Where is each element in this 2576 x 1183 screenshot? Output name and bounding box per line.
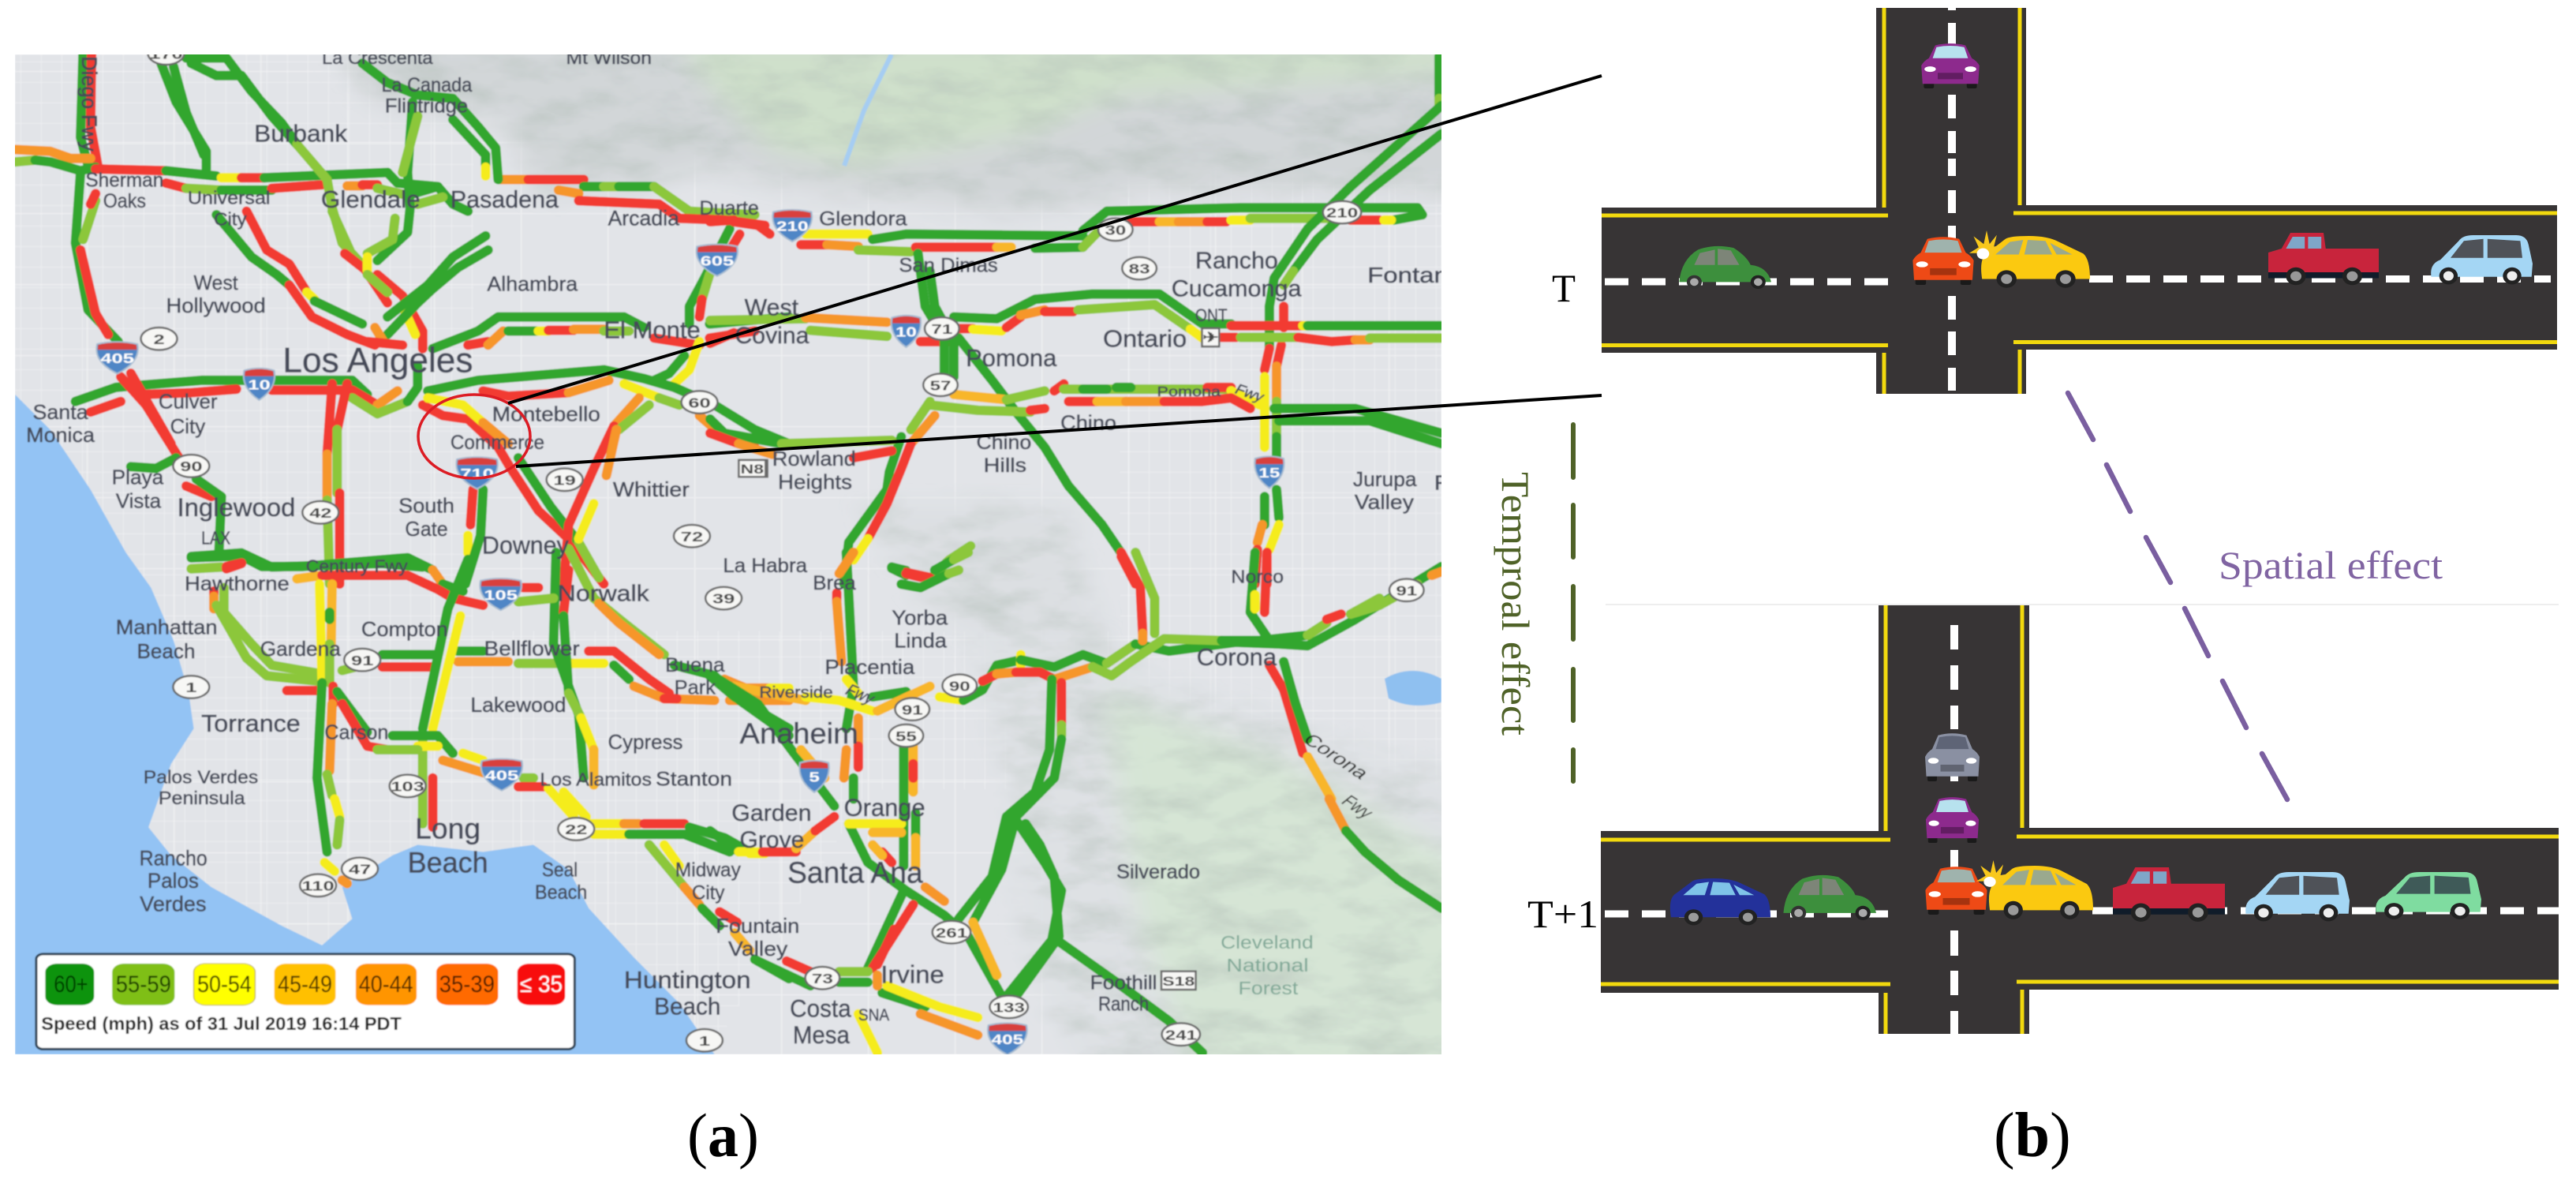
car: purple, front view [1921, 43, 1980, 88]
city labels: southwest: Compton [361, 618, 448, 641]
route shields: northeast: 71 [931, 321, 953, 337]
yellow edge lines [1602, 8, 2557, 394]
map land background [15, 54, 1441, 1054]
city labels: southeast: Grove [740, 827, 804, 853]
city labels: southeast: Corona [1197, 643, 1277, 671]
route shields: northwest: 710 [460, 466, 494, 481]
city labels: southeast: Cleveland [1221, 932, 1314, 953]
city labels: northwest: LAX [201, 528, 230, 548]
label: T: T [1552, 266, 1576, 310]
city labels: northeast: San Dimas [899, 255, 998, 276]
speed legend: Speed (mph) as of 31 Jul 2019 16:14 PDT [41, 1014, 402, 1035]
city labels: southwest: Palos [148, 869, 199, 893]
car: dark blue hatchback [1670, 878, 1770, 925]
route shields: northwest: 2 [153, 331, 165, 347]
route shields: southeast: 5 [809, 769, 820, 785]
route shields: southeast: 133 [993, 1000, 1025, 1016]
city labels: northwest: West [194, 271, 238, 294]
city labels: southwest: Verdes [140, 892, 206, 915]
city labels: northeast [723, 209, 1464, 587]
city labels: southeast: Brea [813, 573, 856, 594]
car: orange, front view [1925, 867, 1987, 915]
route shields: northwest: 19 [553, 472, 576, 489]
route shields: southwest: 103 [391, 778, 424, 795]
label: T+1: T+1 [1527, 892, 1598, 936]
city labels: southeast: Foothill [1090, 973, 1157, 994]
city labels: northeast: Norco [1231, 567, 1284, 587]
city labels: northwest: Arcadia [608, 206, 680, 230]
collision burst [1976, 860, 2011, 890]
river [844, 54, 892, 166]
speed legend [36, 954, 574, 1049]
city labels: northwest: Sherman [85, 170, 163, 191]
speed legend: 35-39 [439, 971, 495, 998]
temporal effect dashed line [1571, 425, 1576, 781]
city labels: northwest: Gate [405, 518, 448, 541]
city labels: northwest: Monica [26, 424, 95, 447]
route shields: northwest: 10 [248, 376, 271, 393]
route shields: northeast: 83 [1129, 261, 1150, 277]
city labels: northeast: Heights [778, 470, 852, 493]
road scene at time T [1602, 8, 2557, 394]
city labels: northwest: Playa [112, 466, 163, 489]
route shields: northwest: 42 [309, 505, 331, 521]
city labels: northwest: Vista [116, 489, 161, 512]
city labels: southwest: Los Alamitos [540, 769, 652, 790]
street grid [164, 226, 1416, 841]
city labels: southeast: Ranch [1098, 994, 1149, 1015]
city labels: southeast: Mesa [793, 1020, 850, 1049]
vertical lane dashes [1950, 625, 1958, 1034]
lake [1385, 671, 1441, 706]
city labels: northwest: Culver [159, 390, 218, 413]
speed legend: 60+ [54, 971, 88, 998]
roads: northwest quadrant [15, 54, 789, 584]
speed legend: 40-44 [359, 971, 413, 998]
city labels: southeast: Anaheim [740, 718, 858, 750]
city labels: southwest: Midway [675, 860, 742, 881]
city labels: southeast: Linda [894, 629, 948, 652]
city labels: southeast: Silverado [1116, 862, 1200, 883]
route shields: northwest: 405 [100, 350, 134, 366]
city labels: northeast: La Habra [723, 556, 808, 577]
speed legend: 45-49 [278, 971, 332, 998]
santa ana mountains [983, 639, 1441, 1054]
city labels: southeast: Costa [790, 994, 851, 1022]
route shields: southwest: 405 [485, 767, 518, 783]
city labels: northeast: Rancho [1195, 248, 1278, 274]
route shields: northeast: 15 [1258, 465, 1281, 481]
route shields: southwest: 105 [484, 587, 518, 603]
city labels: northwest: Burbank [254, 120, 347, 147]
city labels: southeast: Fwy [1337, 792, 1378, 822]
city labels: northeast: Rowland [772, 447, 856, 470]
white lane dashes [1605, 279, 2551, 282]
city labels: northeast: Ontario [1103, 325, 1187, 352]
city labels: northeast: Pomona [1157, 384, 1221, 399]
green mountains [694, 54, 1434, 159]
city labels: northwest: Whittier [613, 478, 690, 501]
speed legend: ≤ 35 [520, 971, 563, 998]
car: green beetle [1679, 246, 1771, 289]
route shields: southwest: 1 [699, 1033, 710, 1049]
city labels: southeast: Orange [844, 793, 925, 822]
route shields: northeast: N8 [741, 462, 764, 477]
city labels: southwest: Hawthorne [185, 574, 290, 594]
route shields: southeast: 241 [1165, 1027, 1197, 1043]
city labels: southwest: Palos Verdes [144, 767, 258, 788]
city labels: southwest: Bellflower [484, 637, 580, 660]
route shields: southeast: 91 [902, 702, 923, 718]
city labels: southeast: SNA [858, 1005, 889, 1024]
car: purple, front view [1926, 797, 1979, 843]
city labels: southwest: Torrance [201, 709, 301, 736]
route shields: northeast: 210 [776, 219, 808, 234]
city labels: southeast [716, 573, 1378, 1049]
car: green beetle [1783, 875, 1876, 920]
route shields: northeast: 30 [1105, 223, 1126, 238]
route shields: northeast: 57 [930, 377, 952, 394]
city labels: southeast: National [1226, 955, 1309, 975]
car: orange, front view [1912, 237, 1974, 285]
city labels: southwest: Carson [324, 721, 388, 743]
route shields: southwest: 91 [351, 653, 373, 668]
asphalt [1602, 8, 2557, 394]
caption (a): (a) [687, 1101, 759, 1170]
city labels: southwest: Park [675, 677, 716, 698]
city labels: southeast: Riverside [759, 683, 833, 702]
city labels: northeast: Pomona [966, 344, 1057, 372]
city labels: southwest: Gardena [260, 637, 341, 660]
speed legend: 50-54 [197, 971, 252, 998]
vertical lane dashes [1948, 8, 1956, 391]
city labels: northwest: City [170, 414, 205, 438]
city labels: northeast: West [745, 294, 798, 320]
route shields: northwest [96, 42, 768, 548]
roads: southeast quadrant [710, 552, 1441, 1053]
city labels: northeast: Covina [735, 323, 809, 349]
city labels: northwest: Universal [188, 188, 270, 208]
city labels: northwest [26, 48, 759, 576]
city labels: northeast: R [1434, 471, 1451, 494]
city labels: northwest: South [398, 494, 454, 517]
city labels: southwest: Beach [535, 882, 587, 903]
city labels: southwest: Seal [542, 860, 578, 881]
city labels: southwest: City [692, 883, 725, 904]
route shields: southwest [173, 578, 742, 1052]
city labels: northeast: Jurupa [1353, 467, 1417, 491]
city labels: northwest: Flintridge [385, 96, 468, 117]
city labels: northwest: Los Angeles [282, 340, 473, 380]
city labels: northwest: Duarte [700, 198, 759, 219]
city labels: southwest: Cypress [608, 731, 682, 754]
city labels: southeast: Santa Ana [787, 855, 923, 889]
spatial effect label: Spatial effect [2219, 543, 2443, 587]
car: red pickup [2268, 233, 2379, 285]
city labels: northeast: Fontana [1367, 263, 1464, 287]
route shields: northwest: 605 [701, 253, 734, 268]
city labels: northeast: Glendora [819, 209, 907, 230]
car: mint hatchback [2376, 872, 2481, 919]
speed legend: 55-59 [116, 971, 171, 998]
major streets [15, 54, 1441, 1054]
temporal effect label: Temproal effect [1494, 472, 1538, 736]
city labels: southwest: Beach [654, 993, 720, 1020]
route shields: southeast: 55 [895, 728, 917, 744]
route shields: northeast: ✈ [1202, 330, 1219, 346]
route shields: southwest: 110 [302, 878, 335, 894]
city labels: southwest: Norwalk [558, 581, 649, 606]
route shields: southeast: 405 [992, 1031, 1023, 1047]
city labels: southeast: Valley [728, 938, 788, 960]
city labels: northwest: Pasadena [451, 186, 559, 213]
city labels: northeast: Fwy [1232, 381, 1268, 405]
car: yellow sedan [1981, 236, 2090, 288]
chino hills [868, 504, 1100, 641]
route shields: southwest: 47 [349, 861, 371, 878]
city labels: northwest: Alhambra [487, 272, 578, 295]
city labels: southwest: Long [415, 812, 480, 845]
faint divider [1606, 604, 2559, 605]
city labels: northwest: Montebello [492, 402, 600, 425]
route shields: southeast: 261 [936, 925, 967, 941]
route shields: northwest: 72 [681, 529, 703, 545]
city labels: southwest [116, 574, 751, 1020]
city labels: southwest: Rancho [140, 846, 208, 870]
callout line: lower [516, 395, 1602, 466]
route shields: southwest: 22 [565, 822, 587, 837]
route shields: southeast: S18 [1162, 975, 1195, 989]
city labels: southeast: Fountain [716, 915, 799, 938]
red circle: Commerce area [418, 395, 530, 478]
route shields: southeast: 73 [812, 971, 833, 986]
collision burst [1969, 230, 2005, 263]
road scene at time T+1 [1601, 605, 2559, 1034]
city labels: northwest: Inglewood [178, 493, 295, 522]
city labels: southwest: Lakewood [470, 694, 566, 717]
yellow edge lines [1601, 605, 2559, 1034]
city labels: southeast: Placentia [824, 656, 915, 679]
route shields: northeast: 210 [1326, 205, 1358, 221]
city labels: northeast: Cucamonga [1172, 276, 1302, 301]
spatial effect dashed line [2068, 393, 2287, 799]
city labels: northwest: Downey [482, 532, 569, 560]
city labels: northeast: Chino [976, 432, 1031, 454]
city labels: southeast: Fwy [841, 681, 879, 708]
route shields: northeast: 10 [895, 324, 917, 340]
route shields: northwest: 170 [149, 46, 183, 62]
city labels: southwest: Huntington [624, 967, 751, 994]
city labels: northwest: Mt Wilson [566, 48, 652, 69]
car: light blue hatchback [2245, 872, 2350, 921]
route shields: southwest: 39 [712, 591, 735, 607]
city labels: northwest: El Monte [604, 316, 701, 343]
route shields: southeast: 90 [949, 678, 970, 694]
city labels: southwest: Manhattan [116, 616, 218, 638]
asphalt [1601, 605, 2559, 1034]
city labels: northeast: Valley [1355, 490, 1414, 514]
city labels: northwest: Santa [32, 401, 88, 424]
route shields: southwest: 1 [185, 679, 196, 695]
city labels: southeast: Garden [731, 800, 811, 826]
roads: northeast quadrant [710, 56, 1441, 584]
city labels: southwest: Beach [408, 846, 488, 878]
city labels: northwest: City [214, 209, 247, 230]
caption (b): (b) [1994, 1101, 2071, 1170]
city labels: northwest: La Crescenta [322, 48, 433, 69]
city labels: northwest: Hollywood [166, 294, 266, 317]
ocean [15, 395, 715, 1054]
white lane dashes [1605, 911, 2559, 914]
city labels: northwest: Century Fwy [306, 556, 408, 576]
city labels: northwest: Diego Fwy [77, 56, 101, 152]
city labels: southwest: Stanton [656, 768, 732, 790]
city labels: southwest: Peninsula [159, 788, 245, 809]
city labels: southeast: Yorba [892, 606, 948, 629]
car: light blue hatchback [2431, 235, 2533, 284]
city labels: northwest: La Canada [381, 75, 472, 96]
roads: southwest quadrant [191, 549, 789, 979]
city labels: northwest: Oaks [103, 191, 146, 212]
cleveland forest [1113, 709, 1441, 1054]
callout line: upper [508, 76, 1602, 403]
city labels: southwest: Beach [136, 639, 195, 663]
city labels: northeast: Hills [984, 455, 1026, 477]
car: yellow sedan [1989, 866, 2093, 919]
car: grey, front view [1925, 733, 1980, 781]
car: red pickup [2113, 867, 2225, 922]
panel a: traffic map [15, 39, 1483, 1089]
route shields: northwest: 90 [180, 459, 203, 474]
city labels: northeast: Chino [1060, 411, 1116, 434]
route shields: northeast [738, 201, 1361, 489]
route shields: southeast [799, 578, 1424, 1055]
city labels: northwest: Glendale [321, 186, 421, 213]
route shields: northwest: N8 [741, 462, 765, 477]
city labels: southeast: Forest [1239, 978, 1299, 998]
city labels: southeast: Corona [1299, 731, 1374, 783]
grey hills [341, 54, 1441, 215]
city labels: southeast: Irvine [880, 960, 944, 988]
city labels: northeast: ONT [1195, 305, 1228, 325]
route shields: northwest: 60 [688, 395, 711, 410]
route shields: southeast: 91 [1396, 583, 1417, 599]
city labels: southwest: Buena [665, 655, 725, 676]
city labels: northwest: Commerce [451, 432, 544, 454]
